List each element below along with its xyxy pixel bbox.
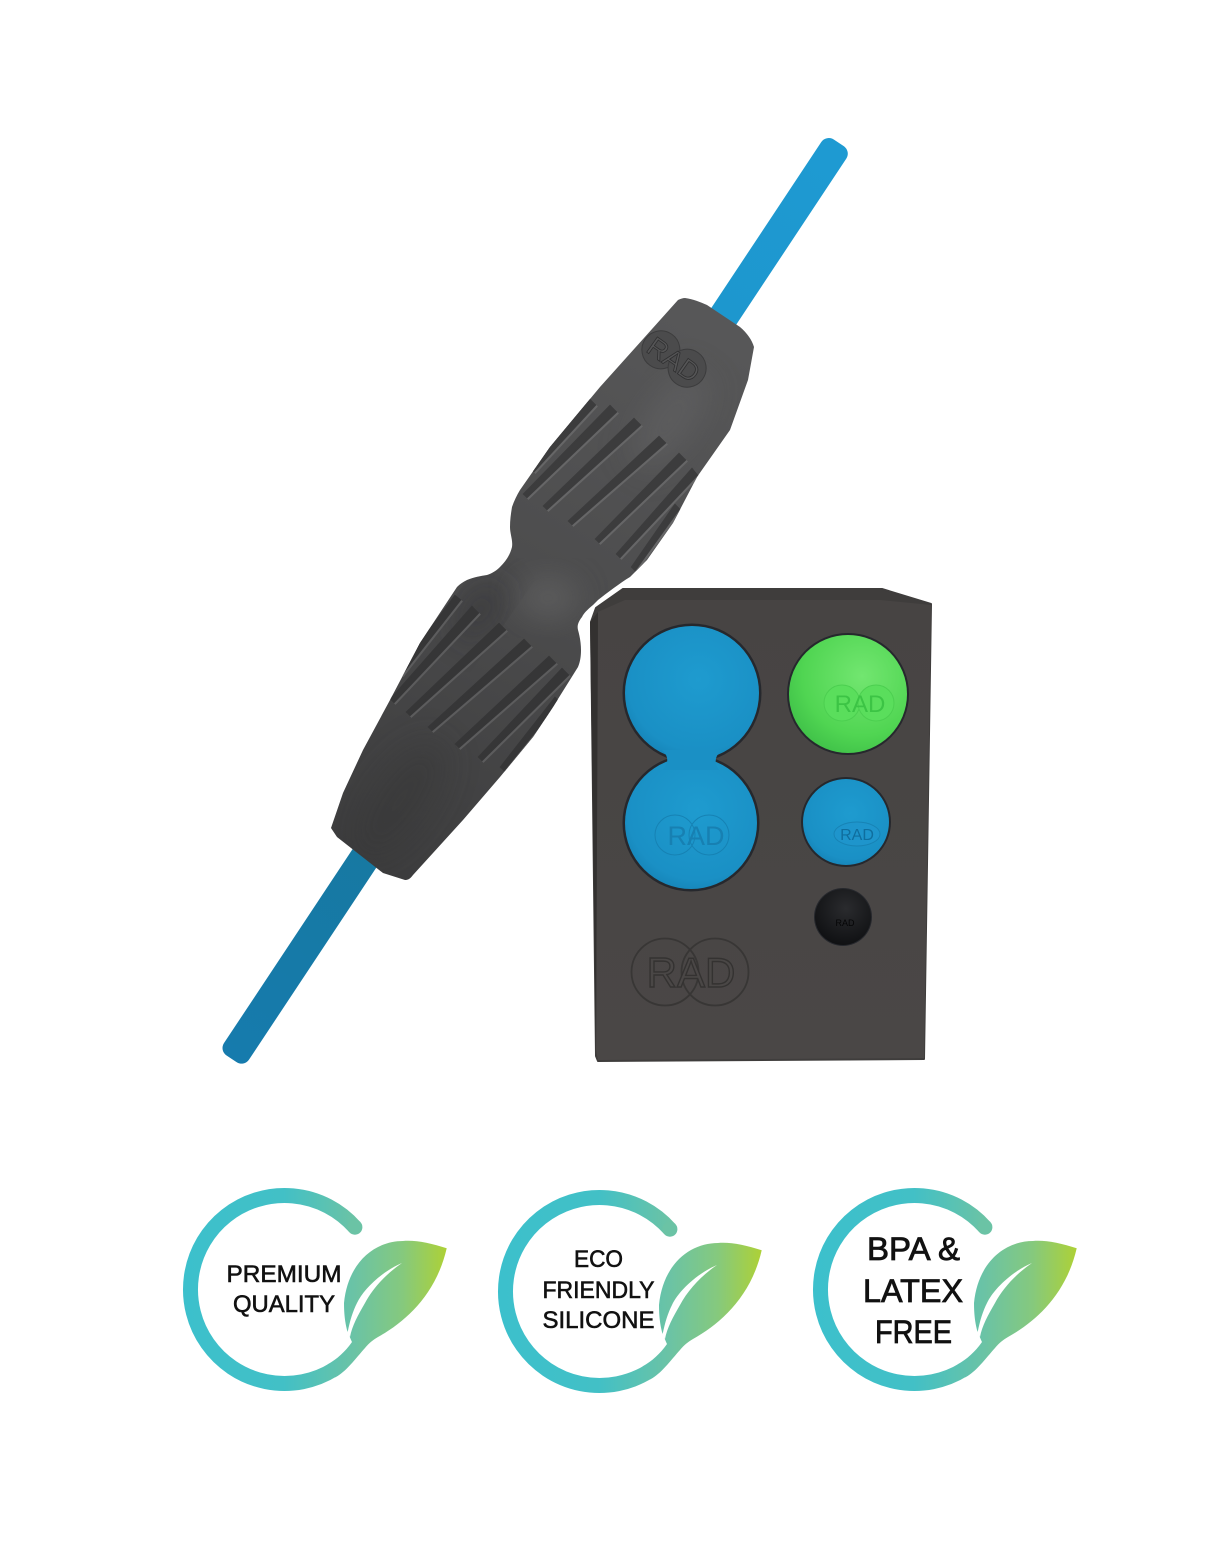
product: blue massage rod [219,135,851,1067]
roller logo [634,323,714,395]
block body [590,589,931,1061]
text [226,1261,342,1318]
text [863,1231,963,1350]
small blue ball: RAD [840,827,874,844]
icon: leaf [958,1241,1077,1377]
small black ball: RAD [835,918,855,928]
text [542,1246,654,1334]
roller logo: RAD [641,331,705,388]
text: BPA & [867,1231,960,1267]
blue peanut ball [625,626,759,889]
ring [820,1195,985,1383]
product: grey roller [331,298,754,880]
block logo: RAD [647,949,735,996]
text: PREMIUM [226,1261,342,1288]
ball logo: RAD [667,821,725,851]
text: QUALITY [233,1291,335,1318]
ring cap [977,1220,992,1235]
badge: bpa and latex free [820,1195,1077,1383]
small blue ball [803,779,889,865]
roller shading [403,581,569,771]
ball sockets [622,624,909,946]
icon: leaf [643,1243,762,1379]
ring [190,1195,355,1383]
roller ribs lower [391,596,570,772]
text: FRIENDLY [542,1277,654,1304]
block logo [632,938,748,1006]
product: foam block with balls [590,589,931,1061]
badge: premium quality [190,1195,447,1383]
ring cap [347,1220,362,1235]
green ball [789,635,907,753]
icon: leaf [328,1241,447,1377]
roller ribs upper [524,399,698,572]
text: FREE [875,1314,952,1350]
ring [505,1197,670,1385]
text: LATEX [863,1273,963,1309]
text: ECO [574,1246,623,1273]
small black ball [815,889,871,945]
ring cap [662,1222,677,1237]
green ball: RAD [835,691,885,718]
badge: eco friendly silicone [505,1197,762,1385]
ball logo [655,815,729,855]
text: SILICONE [542,1307,654,1334]
